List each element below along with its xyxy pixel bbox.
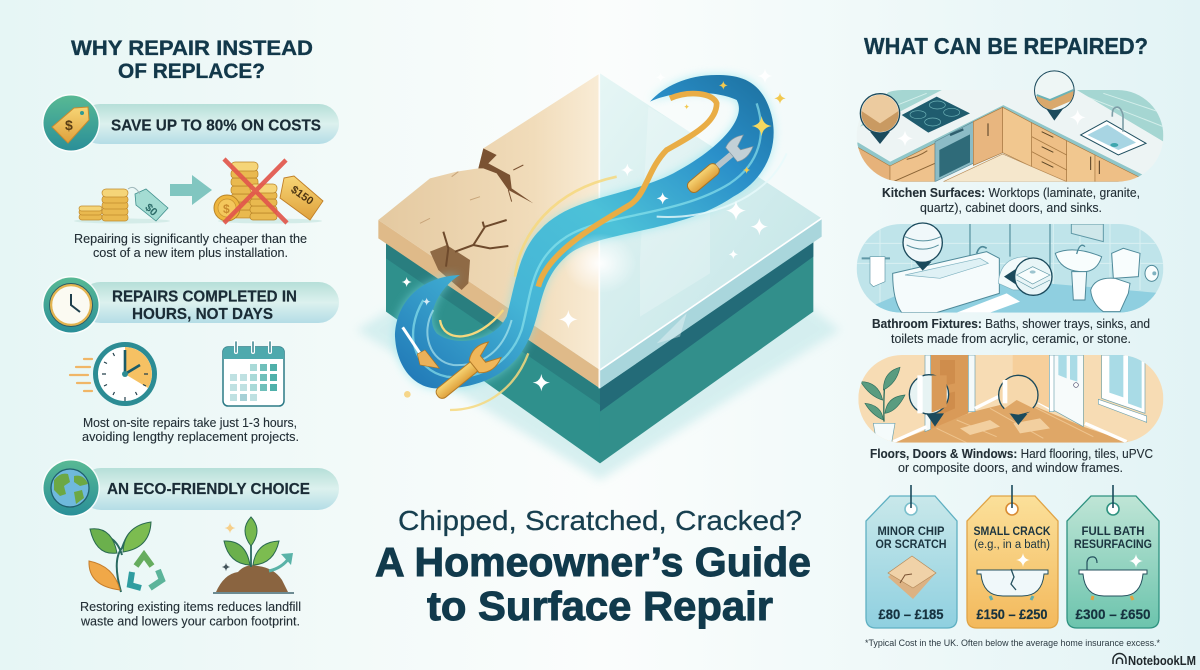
panel: why repair instead of replace [42,37,339,628]
heading: what can be repaired: WHAT CAN BE REPAIRED? [864,33,1148,59]
centre seam [597,73,602,388]
text: repair time note [82,415,299,444]
title: A Homeowner’s Guide [375,539,811,585]
arrow: cost comparison [170,175,212,205]
icon: fast clock [70,342,157,406]
marker: floor edge [999,375,1038,425]
text: repair time note: avoiding lengthy replacement projects. [82,429,299,444]
text: repair cost note: Repairing is significantly cheaper than the [74,231,307,246]
price tag: small crack: (e.g., in a bath) [974,539,1050,551]
marker: bath rim [903,223,942,271]
text: kitchen surfaces: Kitchen Surfaces: Worktops (laminate, granite, [882,185,1140,200]
price tag: minor chip or scratch [866,485,957,628]
heading: why repair: WHY REPAIR INSTEAD [71,37,313,60]
text: repair time note: Most on-site repairs take just 1-3 hours, [83,415,297,430]
icon: sprout in soil [213,517,294,593]
base block: right face [600,242,813,463]
text: bathroom fixtures line two: toilets made from acrylic, ceramic, or stone. [891,331,1131,346]
price tag: minor chip or scratch: OR SCRATCH [876,539,946,551]
icon: large wrench [429,339,503,406]
slab: restored glass half [600,73,822,388]
title: to Surface Repair [427,583,773,629]
text: floors doors and windows: Floors, Doors & Windows: Hard flooring, tiles, uPVC [870,446,1153,461]
text: floors doors and windows line two: or composite doors, and window frames. [898,460,1123,475]
pill: save up to 80%: $ [65,117,73,133]
marker: door frame [909,375,949,427]
price tag: full bath resurfacing: RESURFACING [1074,539,1152,551]
price tag: minor chip or scratch: MINOR CHIP [878,526,945,538]
pill: repairs completed in hours: REPAIRS COMPLETED IN [112,289,297,306]
pill: save up to 80% [42,94,339,152]
text: kitchen surfaces line two: quartz), cabinet doors, and sinks. [920,200,1102,215]
price tag: small crack [967,485,1058,628]
illustration: bathroom fixtures [857,223,1163,313]
icon: small wrench on ribbon [682,132,755,199]
price tag: full bath resurfacing [1067,485,1159,628]
heading: why repair: OF REPLACE? [118,60,265,83]
marker: shower tray [1004,258,1052,295]
title [375,505,811,629]
heading: why repair [71,37,313,83]
icon: brush [403,327,439,368]
hero: cracked surface repaired by ribbon [357,69,840,480]
price tag: small crack: £150 – £250 [976,606,1048,622]
icon: calendar [223,342,284,406]
illustration: floors doors and windows [858,355,1163,443]
icon: crossed out coins and high price tag [214,159,323,224]
icon: crossed out coins and high price tag: $ [223,202,230,216]
marker: counter edge [1035,71,1074,121]
glow on seam [563,233,637,293]
text: repair cost note: cost of a new item plus installation. [93,245,288,260]
icon: leaves and recycling symbol [89,522,162,592]
price tag: full bath resurfacing: FULL BATH [1082,526,1144,538]
pill: eco-friendly choice: AN ECO-FRIENDLY CHOICE [107,481,310,498]
icon: small coin stack with low price tag: $0 [142,202,159,219]
ribbon: repair flow [395,75,787,410]
pill: save up to 80%: SAVE UP TO 80% ON COSTS [111,118,321,134]
marker: worktop corner [860,93,900,144]
price tag: small crack: SMALL CRACK [974,526,1051,538]
title: Chipped, Scratched, Cracked? [398,505,802,536]
pill: repairs completed in hours [42,276,339,334]
sparkles [402,69,786,398]
text: eco note [80,599,301,628]
price tag: full bath resurfacing: £300 – £650 [1076,606,1151,622]
price tag: minor chip or scratch: £80 – £185 [878,606,944,622]
slab: damaged tan half [378,73,600,388]
text: eco note: waste and lowers your carbon footprint. [80,614,300,628]
pill: repairs completed in hours: HOURS, NOT DAYS [132,306,273,323]
ground shadow [357,300,840,480]
text: eco note: Restoring existing items reduces landfill [80,599,301,614]
footnote: *Typical Cost in the UK. Often below the average home insurance excess.* [865,638,1160,649]
pill: eco-friendly choice [42,459,339,517]
base block: left face [386,242,600,463]
icon: small coin stack with low price tag [74,187,170,224]
illustration: kitchen surfaces [857,71,1163,182]
text: bathroom fixtures: Bathroom Fixtures: Baths, shower trays, sinks, and [872,316,1150,331]
panel: what can be repaired [857,33,1163,649]
text: repair cost note [74,231,307,260]
icon: crossed out coins and high price tag: $150 [288,184,315,208]
